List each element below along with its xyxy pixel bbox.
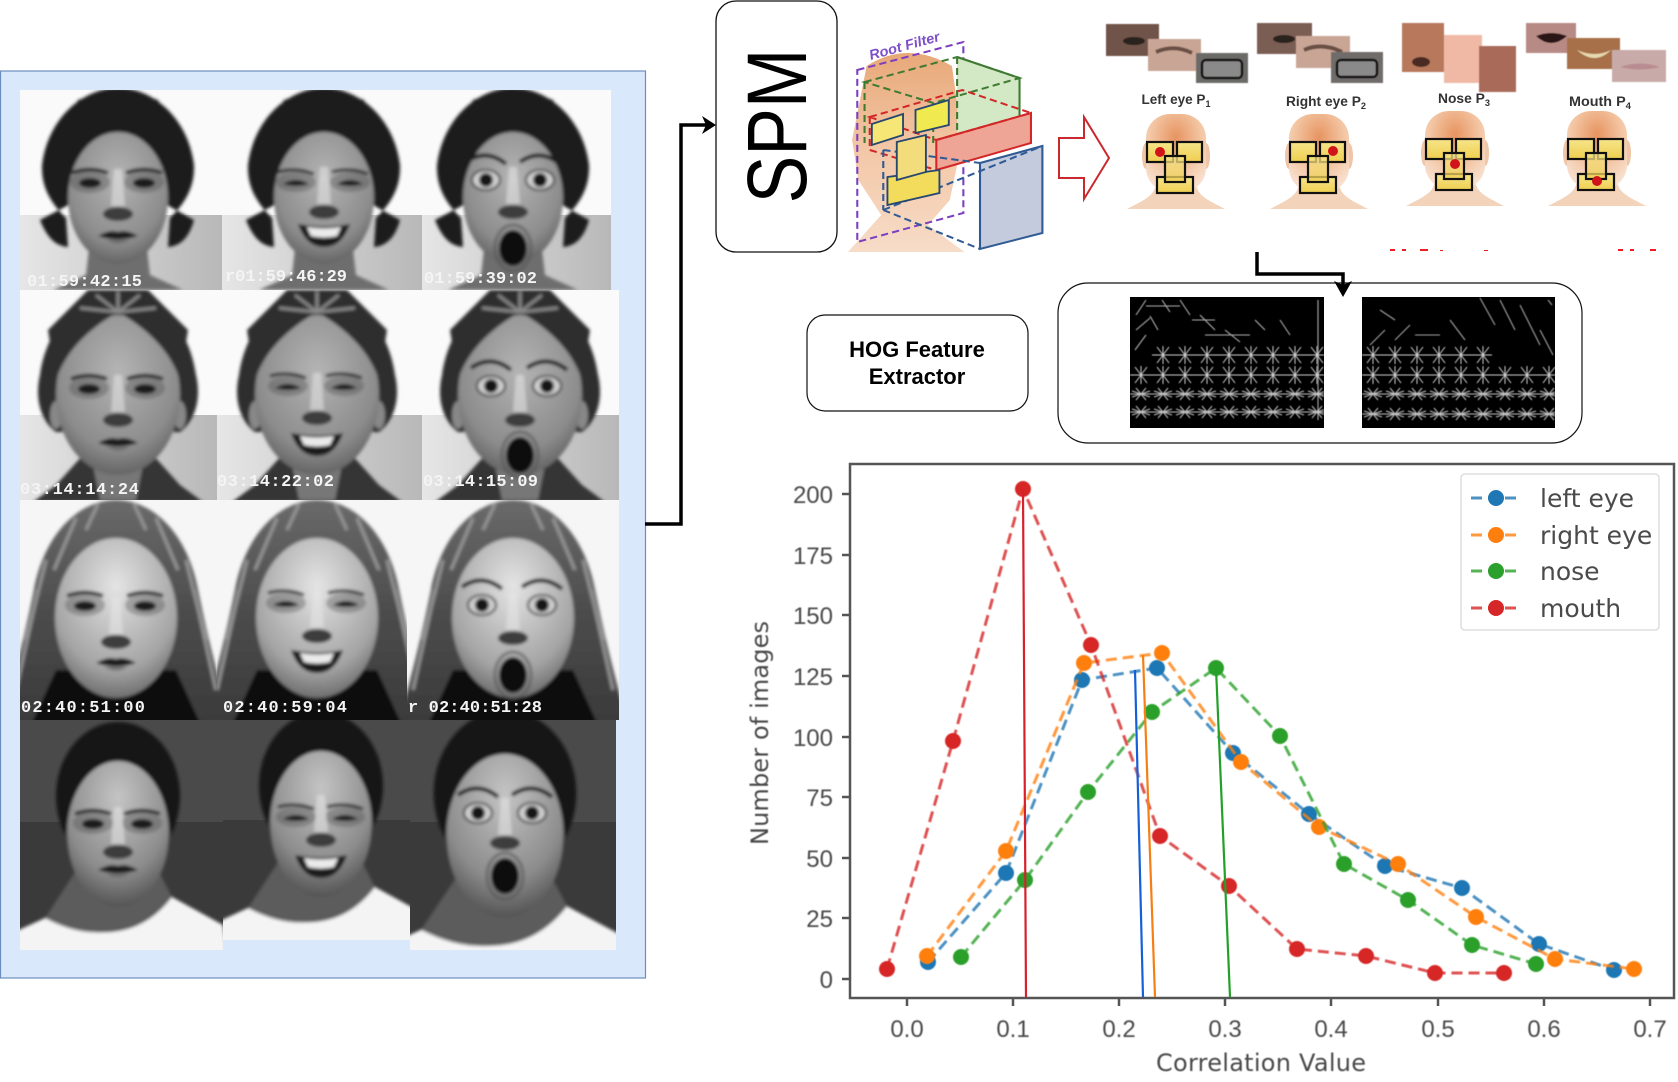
panel: facial expression image grid [0,71,646,978]
blue part box [883,146,1042,249]
y axis title: Number of images [746,621,774,845]
photo: subject 4 happy [223,720,410,940]
face model: right eye [1270,114,1368,209]
photo: subject 2 surprised: 03:14:15:09 [423,473,538,492]
x axis tick labels: 0.6 [1527,1016,1561,1043]
series: left eye [920,660,1622,978]
vertical mean markers [1023,489,1230,997]
thumbnails: nose [1402,23,1516,92]
legend: nose [1471,557,1600,586]
label: mouth: 4 [1626,101,1631,111]
x axis tick labels: 0.4 [1314,1016,1348,1043]
yellow part filters [872,100,949,205]
photo: subject 3 happy: 02:40:59:04 [223,699,347,718]
arrow: SPM parts to HOG output [1257,252,1352,297]
y axis tick labels: 0 [820,967,833,994]
box: HOG Feature Extractor: Extractor [869,364,966,389]
photo: subject 4 surprised [410,720,616,950]
photo: subject 2 happy: 03:14:22:02 [217,473,334,492]
y axis tick labels: 175 [793,543,833,570]
x axis tick labels: 0.2 [1102,1016,1136,1043]
green part box [865,57,1020,145]
thumbnails: mouth [1526,23,1666,82]
photo: subject 1 surprised [422,90,611,290]
red part box [870,90,1031,170]
photo: subject 3 happy [217,500,407,720]
face model: nose [1406,111,1504,206]
arrow: hollow red [1059,117,1109,199]
legend: right eye: right eye [1540,521,1652,550]
series: nose [953,660,1544,972]
photo: subject 2 surprised [422,290,619,500]
photo: subject 2 neutral [20,290,217,500]
label: nose: Nose P [1438,91,1484,106]
y axis tick labels: 100 [793,725,833,752]
series: right eye [919,645,1642,977]
chart: correlation value line plot [746,464,1674,1077]
photo: subject 2 neutral: 03:14:14:24 [20,481,139,500]
y axis tick labels: 50 [806,846,833,873]
column: mouth part [1526,23,1666,206]
label: right eye: 2 [1361,101,1366,111]
HOG image left [1130,297,1324,428]
box: HOG Feature Extractor: HOG Feature [849,337,985,362]
photo: subject 3 neutral [20,500,217,720]
root filter dashed outline [857,42,963,242]
head silhouette [848,53,964,252]
photo: subject 3 surprised [407,500,619,720]
series: mouth [879,481,1512,981]
x axis tick labels: 0.1 [996,1016,1030,1043]
y axis tick labels: 200 [793,482,833,509]
column: right eye part [1257,23,1383,209]
column: nose part [1402,23,1516,206]
plot frame [842,464,1674,1006]
box: HOG Feature Extractor [807,315,1028,411]
label: left eye: Left eye P [1142,92,1205,107]
legend: right eye [1471,521,1652,550]
label: nose: 3 [1485,98,1490,108]
box: SPM: SPM [729,49,824,203]
x axis tick labels: 0.7 [1633,1016,1667,1043]
x axis tick labels: 0.3 [1208,1016,1242,1043]
face model: mouth [1548,111,1646,206]
box: SPM [716,1,837,252]
legend: left eye [1471,484,1634,513]
photo: subject 1 happy [222,90,422,290]
label: mouth: Mouth P [1569,94,1622,109]
y axis tick labels: 125 [793,664,833,691]
photo: subject 1 happy: r01:59:46:29 [225,268,347,287]
x axis tick labels: 0.0 [890,1016,924,1043]
diagram: root filter 3D model [848,29,1042,252]
y axis tick labels: 75 [806,785,833,812]
legend: left eye: left eye [1540,484,1634,513]
column: left eye part [1106,24,1248,209]
label: left eye: 1 [1205,99,1210,109]
legend [1461,474,1659,630]
photo: subject 3 surprised: r 02:40:51:28 [408,699,542,718]
panel: HOG output images [1058,283,1582,443]
root filter label: Root Filter [867,29,943,64]
arrow: image grid to SPM [645,116,716,524]
thumbnails: right eye [1257,23,1383,83]
thumbnails: left eye [1106,24,1248,83]
photo: subject 2 happy [217,290,422,500]
face model: left eye [1127,114,1225,209]
photo: subject 3 neutral: 02:40:51:00 [21,699,145,718]
y axis tick labels [793,482,833,994]
legend: mouth [1471,594,1621,623]
photo: subject 1 surprised: 01:59:39:02 [424,270,537,289]
HOG image right [1362,297,1555,428]
photo: subject 4 neutral [20,720,223,950]
x axis tick labels [890,1016,1667,1043]
legend: mouth: mouth [1540,594,1621,623]
y axis tick labels: 150 [793,603,833,630]
photo: subject 1 neutral: 01:59:42:15 [27,273,142,292]
photo: subject 1 neutral [20,90,222,292]
clipped red caption fragments [1390,249,1656,251]
label: right eye: Right eye P [1286,94,1360,109]
x axis tick labels: 0.5 [1421,1016,1455,1043]
y axis tick labels: 25 [806,906,833,933]
legend: nose: nose [1540,557,1600,586]
x axis title: Correlation Value [1156,1049,1366,1077]
